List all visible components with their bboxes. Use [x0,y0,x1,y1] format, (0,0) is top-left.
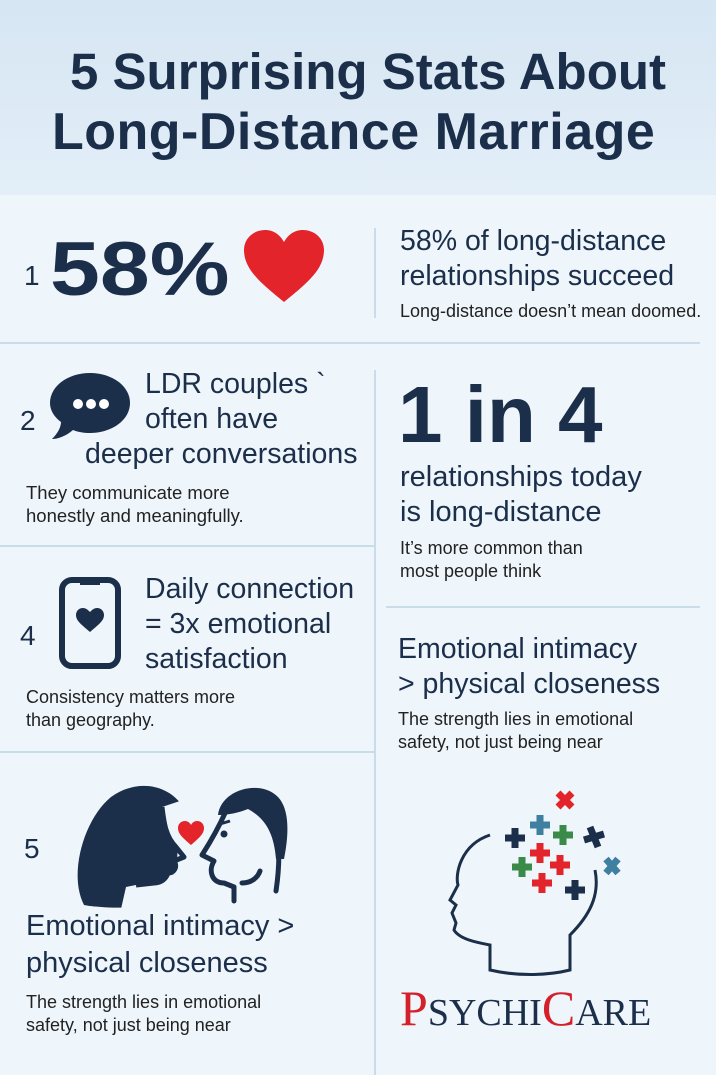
stat 3 text: is long-distance [400,496,602,528]
panel: emotional intimacy right: > physical closeness [398,668,660,700]
stat 4 heading: = 3x emotional [145,608,331,640]
panel: stat 4 [20,573,354,730]
number 4: 4 [20,620,36,651]
panel: emotional intimacy right [398,633,660,752]
stat 5 description: The strength lies in emotional [26,992,261,1012]
title: 5 Surprising Stats About [70,43,666,100]
stat 5 heading: physical closeness [26,947,268,979]
icon: heart [244,230,324,302]
panel: stat 2 [20,368,358,526]
stat 1 text: 58% of long-distance [400,225,666,257]
stat 3 text: most people think [400,561,541,581]
stat 4 description: than geography. [26,710,155,730]
panel: emotional intimacy right: safety, not just being near [398,732,603,752]
stat 5 description: safety, not just being near [26,1015,231,1035]
stat 5 heading: Emotional intimacy > [26,910,294,942]
stat 2 heading: LDR couples ` [145,368,326,400]
number 2: 2 [20,405,36,436]
stat 4 description [26,687,235,730]
panel: emotional intimacy right: Emotional intimacy [398,633,637,665]
panel: emotional intimacy right: The strength lies in emotional [398,709,633,729]
panel: stat 1 [24,225,701,321]
stat 4 heading: Daily connection [145,573,354,605]
logo: head with crosses [448,790,621,976]
stat 4 description: Consistency matters more [26,687,235,707]
panel: stat 3 [398,370,642,581]
stat 5 heading [26,910,294,979]
stat 2 description [26,482,244,526]
stat 4 heading [145,573,354,675]
number 5: 5 [24,833,40,864]
stat 2 heading: often have [145,403,278,435]
icon: couple faces with heart [78,786,288,908]
stat 4 heading: satisfaction [145,643,288,675]
big stat 1 in 4: 1 in 4 [398,370,603,459]
stat 2 description: They communicate more [26,482,230,503]
stat 3 text: relationships today [400,461,642,493]
logo text: PsychiCare: PSYCHICARE [400,980,651,1036]
icon: speech bubble [50,373,130,439]
stat 1 text: relationships succeed [400,260,674,292]
title [52,43,666,161]
stat 5 description [26,992,261,1035]
title: Long-Distance Marriage [52,103,655,161]
stat 1 text: Long-distance doesn’t mean doomed. [400,301,701,321]
stat 3 text: It’s more common than [400,538,583,558]
stat 1 text [400,225,701,321]
stat 2 heading [145,368,326,435]
panel: stat 5 [24,786,294,1035]
stat 2 description: honestly and meaningfully. [26,505,244,526]
number 1: 1 [24,260,40,291]
panel: stat 2: deeper conversations [85,438,358,470]
big stat 58%: 58% [50,227,230,312]
icon: phone with heart [59,577,121,669]
header band [0,0,716,195]
stat 3 text [400,461,642,581]
